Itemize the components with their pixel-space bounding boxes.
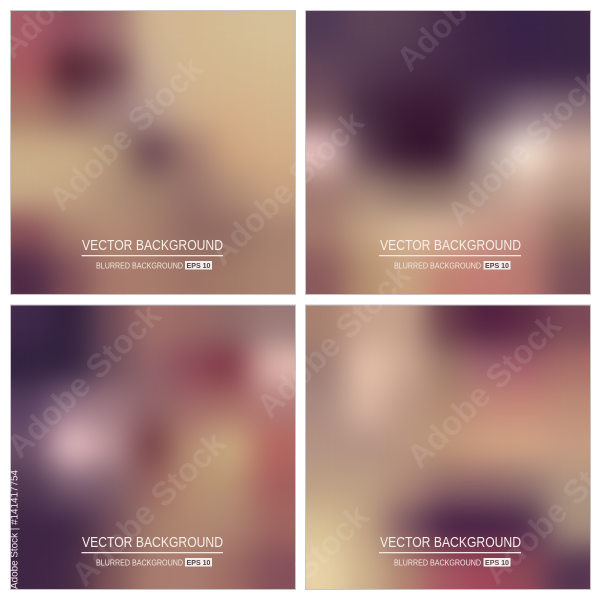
title text (82, 237, 223, 270)
panel: blurred background top right (295, 0, 600, 305)
watermarks: Adobe Stock (202, 103, 371, 272)
title text: EPS 10 (186, 261, 210, 270)
title text: VECTOR BACKGROUND (82, 534, 223, 551)
title text: BLURRED BACKGROUND (394, 262, 481, 270)
panel: blurred background bottom left (0, 295, 305, 600)
watermarks: Adobe Stock (0, 296, 168, 465)
title text: EPS 10 (485, 558, 509, 567)
watermarks: Adobe Stock (249, 256, 418, 425)
title text: EPS 10 (485, 261, 509, 270)
title text: BLURRED BACKGROUND (394, 558, 481, 568)
title text: VECTOR BACKGROUND (380, 534, 521, 551)
panel: blurred background bottom right (295, 295, 600, 600)
panel: blurred background top left (0, 0, 305, 305)
vertical credit: Adobe Stock | #141417754 (8, 470, 20, 589)
watermarks: Adobe Stock (399, 306, 568, 475)
watermarks: Stock (286, 497, 376, 587)
title text: VECTOR BACKGROUND (82, 237, 223, 254)
watermarks: Adobe Stock (64, 424, 233, 593)
title text (379, 237, 521, 270)
title text: VECTOR BACKGROUND (380, 237, 521, 254)
title text: BLURRED BACKGROUND (96, 558, 183, 568)
title text (82, 534, 223, 568)
watermarks: Adobe Stock (41, 49, 210, 218)
title text: EPS 10 (186, 558, 210, 567)
title text (379, 534, 521, 568)
title text: BLURRED BACKGROUND (96, 262, 183, 270)
